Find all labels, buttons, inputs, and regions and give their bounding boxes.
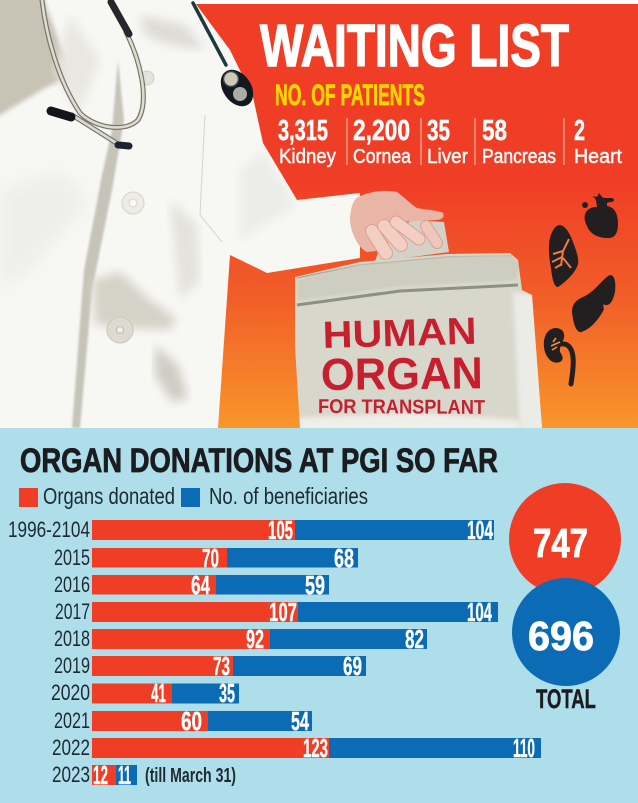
stat: liver: Liver [427, 146, 468, 168]
legend: No. of beneficiaries [209, 483, 368, 509]
subtitle: no. of patients: NO. OF PATIENTS [275, 79, 425, 112]
stat: kidney: 3,315 [278, 115, 328, 147]
total: beneficiaries circle [512, 578, 620, 686]
bag label: human organ for transplant: HUMAN [322, 311, 477, 357]
row: 1996-2104: 104 [467, 515, 493, 545]
legend [19, 483, 368, 509]
row: 2015: 68 [334, 543, 354, 573]
icon: kidney [544, 328, 573, 384]
stat: cornea: 2,200 [353, 115, 410, 147]
row: 2023: 12 [93, 760, 108, 790]
row: 2015 [54, 543, 358, 573]
row: 2019: 2019 [54, 653, 90, 678]
label: total: TOTAL [536, 684, 596, 714]
stat: kidney [278, 115, 336, 168]
icon: stethoscope [42, 0, 260, 146]
row: 2017 [55, 597, 498, 627]
row: 1996-2104: 105 [268, 515, 293, 545]
row: 2019: 73 [213, 651, 230, 681]
row: 2016 [54, 570, 329, 600]
total: organs donated circle: 747 [533, 520, 588, 566]
stat: cornea [353, 115, 412, 168]
row: 2018: 82 [405, 624, 424, 654]
row: 2022: 2022 [52, 735, 90, 760]
stat: pancreas [482, 115, 556, 168]
stat: pancreas: Pancreas [482, 146, 556, 168]
total: beneficiaries circle: 696 [528, 613, 594, 659]
row: 2020: 35 [219, 678, 235, 708]
icon: liver [572, 275, 615, 332]
row: 2020: 2020 [51, 680, 90, 705]
row: 2021: 2021 [54, 708, 90, 733]
icon: heart [582, 193, 618, 238]
photo: doctor in white coat [0, 0, 360, 428]
row: 2017: 104 [467, 597, 492, 627]
legend: Organs donated [43, 483, 175, 509]
row: 2016: 64 [191, 570, 210, 600]
icon: lung [549, 225, 578, 287]
row: 2022 [52, 733, 541, 763]
row: 2019: 69 [343, 651, 362, 681]
row: 2019 [54, 651, 366, 681]
icon: coat buttons [107, 71, 154, 343]
row: 1996-2104: 1996-2104 [8, 517, 90, 542]
row: 2023: 2023 [52, 762, 90, 787]
row: 2022: 110 [513, 733, 535, 763]
row: 2022: 123 [303, 733, 328, 763]
stat: pancreas: 58 [482, 115, 507, 147]
total: organs donated circle [509, 483, 621, 595]
row: 2021: 60 [181, 706, 202, 736]
row: 2020: 41 [151, 678, 166, 708]
stat: liver [427, 115, 468, 168]
row: 2023: (till March 31) [145, 765, 236, 787]
bag label: human organ for transplant: FOR TRANSPLANT [318, 396, 485, 419]
stat: heart [574, 115, 622, 168]
row: 2018 [54, 624, 427, 654]
bag label: human organ for transplant: ORGAN [321, 347, 483, 400]
row: 2021: 54 [291, 706, 309, 736]
row: 2021 [54, 706, 312, 736]
stat: heart: Heart [574, 146, 622, 168]
row: 2023: 11 [118, 760, 131, 790]
illustration: organ transport bag [295, 253, 548, 432]
row: 2020 [51, 678, 239, 708]
row: 2016: 59 [305, 570, 325, 600]
stat: liver: 35 [427, 115, 450, 147]
row: 2015: 70 [202, 543, 219, 573]
panel: waiting list header with gradient background [0, 0, 638, 432]
row: 2015: 2015 [54, 545, 90, 570]
row: 2016: 2016 [54, 572, 90, 597]
heading: organ donations at PGI so far: ORGAN DONATIONS AT PGI SO FAR [20, 442, 498, 480]
stat: heart: 2 [574, 115, 585, 147]
icon: hand holding bag handle [350, 191, 449, 262]
row: 2018: 92 [246, 624, 264, 654]
row: 2018: 2018 [54, 626, 90, 651]
row: 2023 [52, 760, 236, 790]
stat: kidney: Kidney [279, 146, 336, 168]
bar chart: organs donated and beneficiaries by year [8, 515, 541, 790]
stat: cornea: Cornea [353, 146, 412, 168]
bag label: human organ for transplant [318, 311, 485, 419]
row: 2017: 107 [269, 597, 297, 627]
row: 2017: 2017 [55, 599, 90, 624]
row: 1996-2104 [8, 515, 494, 545]
